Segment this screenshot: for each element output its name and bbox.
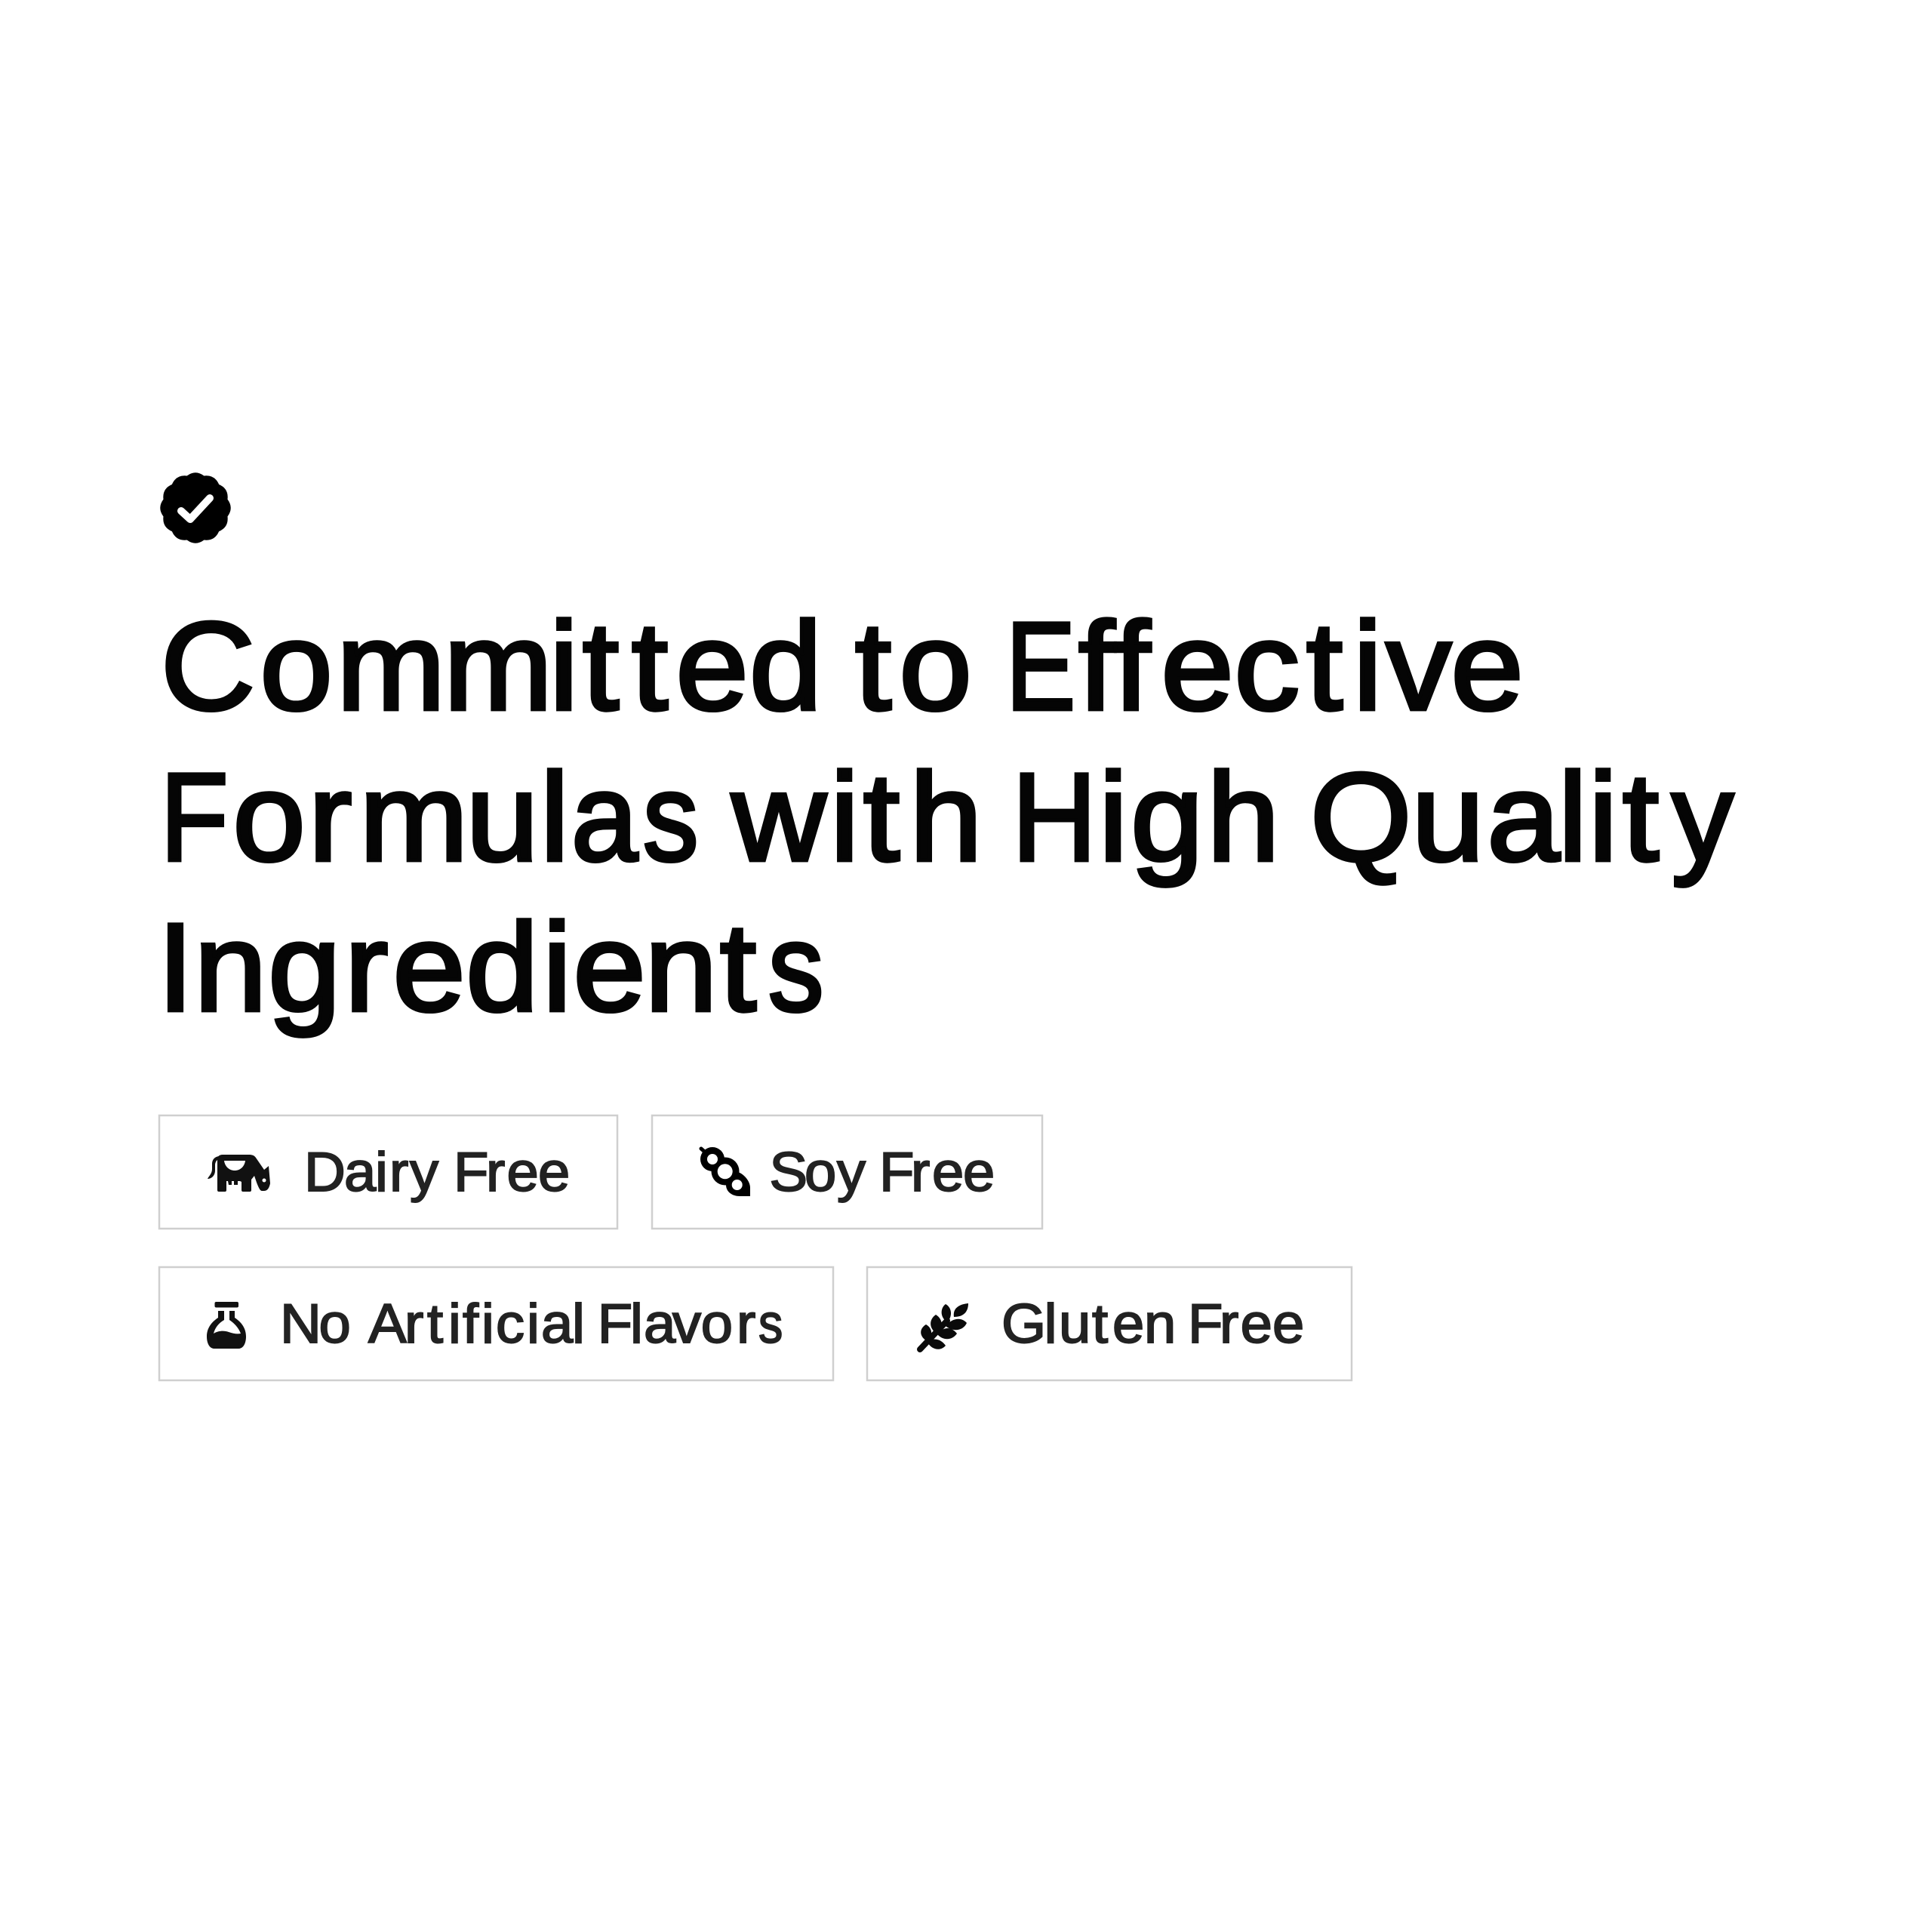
label: gluten free: Gluten Free	[1001, 1293, 1304, 1355]
icon: flask	[207, 1302, 246, 1349]
icon: verified badge	[160, 472, 231, 543]
icon: cow	[208, 1155, 270, 1192]
chip: soy free	[652, 1115, 1042, 1229]
label: soy free: Soy Free	[769, 1141, 995, 1203]
title: Ingredients	[158, 897, 824, 1037]
chip: dairy free	[159, 1115, 617, 1229]
chip: no artificial flavors	[159, 1267, 833, 1380]
label: no artificial flavors: No Artificial Flavors	[280, 1293, 783, 1355]
icon: wheat	[920, 1303, 968, 1349]
icon: soybean pod	[700, 1147, 750, 1196]
label: dairy free: Dairy Free	[304, 1141, 570, 1203]
chip: gluten free	[867, 1267, 1352, 1380]
title: Committed to Effective	[161, 595, 1524, 736]
title	[158, 595, 1734, 1037]
title: Formulas with High Quality	[160, 746, 1734, 887]
